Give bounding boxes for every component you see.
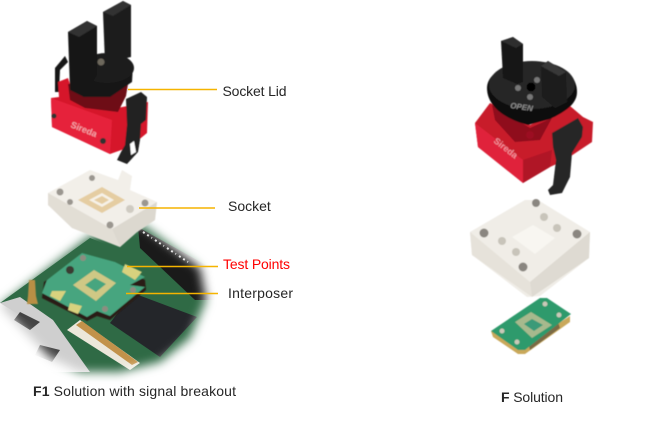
open marking: OPEN [510,101,534,113]
leader line: Socket [139,207,215,209]
F socket [470,199,590,297]
F interposer [491,298,571,354]
left prong [68,21,97,97]
F1 socket [48,170,157,247]
back ring clip [55,56,68,92]
label: Interposer: Interposer [228,285,293,301]
label: Socket: Socket [228,198,271,214]
right prong [103,1,131,63]
red screw [526,131,534,139]
body screws [52,114,56,118]
red socket body [51,78,148,154]
F1 interposer [27,253,146,321]
lid base [83,65,133,97]
brand label: Sireda [492,136,520,161]
red socket body [475,103,593,183]
brand label: Sireda [69,120,99,140]
leader line: Interposer [126,292,218,294]
front prong [541,61,567,108]
caption: F solution: F Solution [501,389,563,405]
caption: F1 solution: F1 Solution with signal breakout [33,383,236,399]
F socket lid assembly [475,37,593,195]
lid disc [80,53,134,83]
coaxial connector [27,280,38,304]
label: Test Points: Test Points [223,256,290,272]
side latch [117,92,147,164]
leader line: Test Points [127,266,218,268]
F1 circuit board with fading edge [0,222,214,380]
label: Socket Lid: Socket Lid [222,83,286,99]
F1 socket lid assembly [51,1,148,164]
side latch [548,118,583,195]
lid disc [487,62,577,125]
test point pads [122,264,142,280]
rear prong [501,37,523,84]
leader line: Socket Lid [128,88,217,90]
